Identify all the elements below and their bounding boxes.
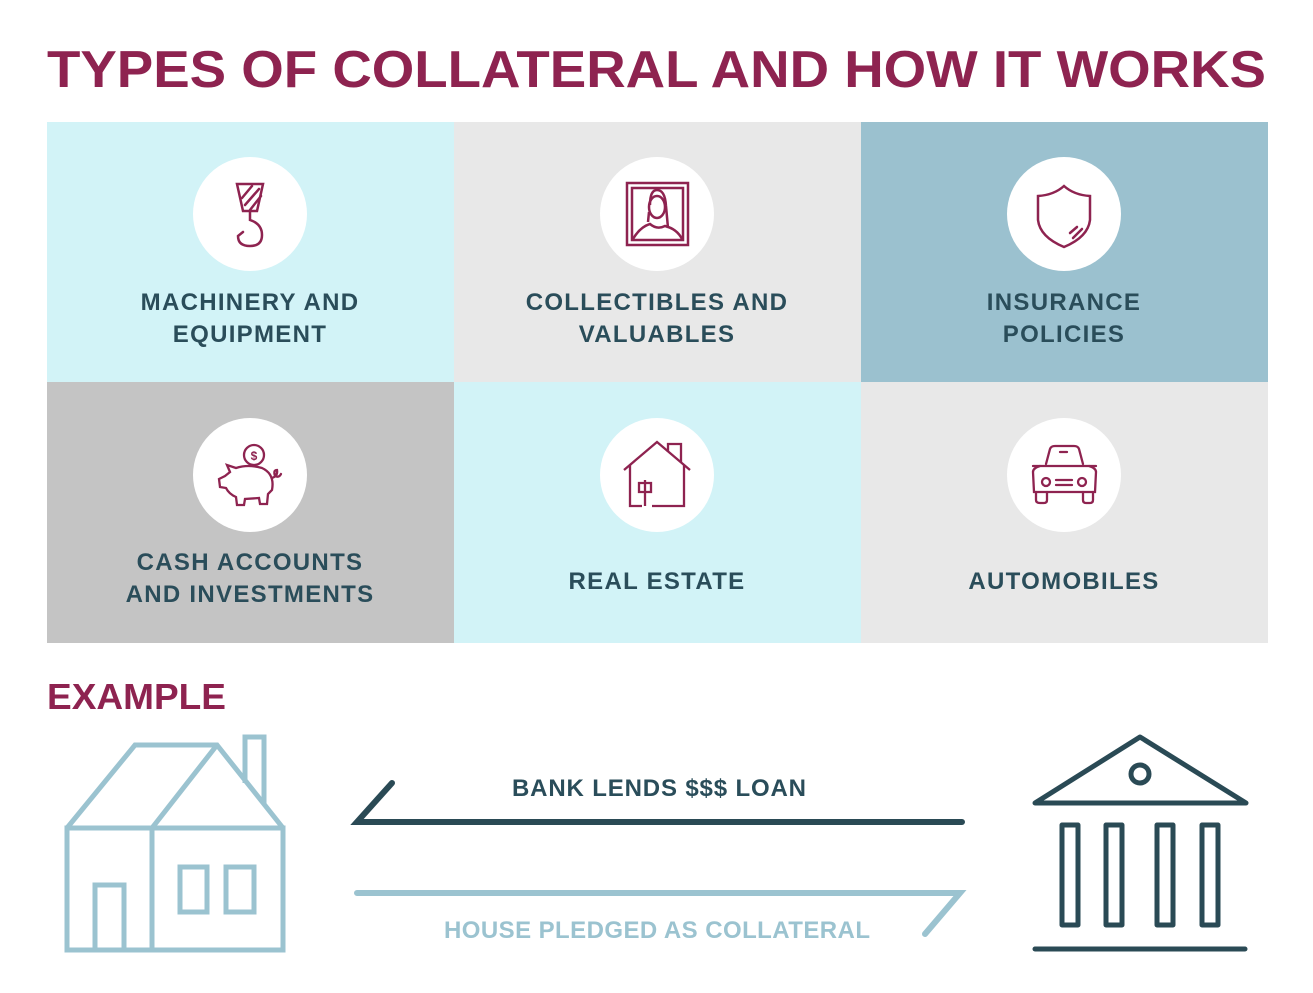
icon: portrait: [627, 183, 688, 245]
arrow: house pledged: HOUSE PLEDGED AS COLLATERAL: [444, 917, 870, 944]
icon: car: [1033, 446, 1096, 503]
label: MACHINERY AND: [141, 289, 359, 316]
panel: cash: [47, 382, 454, 643]
panel: real estate: [454, 382, 861, 643]
title: TYPES OF COLLATERAL AND HOW IT WORKS: [47, 41, 1266, 99]
arrow: bank lends loan: BANK LENDS $$$ LOAN: [512, 775, 806, 802]
label: AUTOMOBILES: [968, 568, 1160, 595]
panel: machinery: [47, 122, 454, 382]
label: AND INVESTMENTS: [126, 581, 374, 608]
icon: house outline: [67, 737, 283, 950]
panel: collectibles: [454, 122, 861, 382]
label: CASH ACCOUNTS: [137, 549, 363, 576]
icon: piggy bank: [219, 445, 281, 505]
label: REAL ESTATE: [569, 568, 745, 595]
icon: bank: [1035, 737, 1246, 949]
panel: insurance: [861, 122, 1268, 382]
label: POLICIES: [1003, 321, 1125, 348]
arrow: house pledged: [357, 893, 960, 944]
panel: automobiles: [861, 382, 1268, 643]
label: VALUABLES: [579, 321, 735, 348]
icon: hook: [237, 184, 263, 246]
icon: piggy bank: $: [251, 449, 258, 463]
label: COLLECTIBLES AND: [526, 289, 788, 316]
arrow: bank lends loan: [357, 775, 962, 822]
heading: example: EXAMPLE: [47, 676, 226, 717]
icon: shield: [1038, 186, 1090, 247]
label: INSURANCE: [987, 289, 1141, 316]
icon: house: [624, 442, 690, 506]
label: EQUIPMENT: [173, 321, 327, 348]
